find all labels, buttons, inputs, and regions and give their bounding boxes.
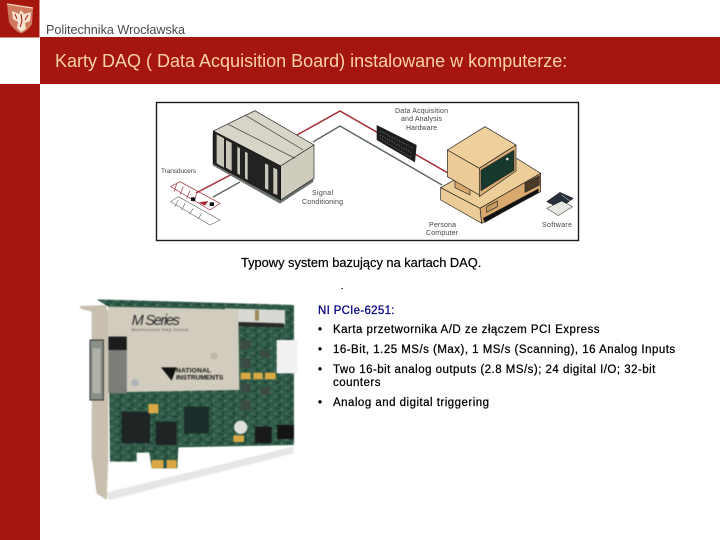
spec item 1: •: [318, 324, 323, 336]
spec item 2: •: [318, 344, 323, 356]
title band: [40, 37, 720, 84]
spec item 1: [318, 324, 600, 336]
diagram labels: Data Acquisition: [395, 108, 448, 115]
diagram labels: Transducers: [161, 168, 197, 175]
diagram labels: Signal: [312, 190, 333, 197]
metal bracket: [80, 305, 108, 500]
spec item 4: •: [318, 397, 323, 409]
small dot: [341, 288, 343, 289]
spec item 3: •: [318, 364, 323, 376]
product photo: NI PCIe-6251 card: NATIONAL: [176, 368, 211, 375]
specifications list: counters: [333, 377, 381, 389]
specifications list: Analog and digital triggering: [333, 397, 490, 409]
diagram labels: Computer: [426, 230, 459, 237]
diagram labels: Hardware: [406, 125, 437, 132]
specifications list: Two 16-bit analog outputs (2.8 MS/s); 24 digital I/O; 32-bit: [333, 364, 656, 376]
specifications list: Karta przetwornika A/D ze złączem PCI Express: [333, 324, 600, 336]
title: Karty DAQ ( Data Acquisition Board) instalowane w komputerze:: [55, 51, 567, 71]
software disks: [547, 192, 573, 216]
specifications list: 16-Bit, 1.25 MS/s (Max), 1 MS/s (Scanning), 16 Analog Inputs: [333, 344, 676, 356]
diagram labels: and Analysis: [401, 116, 442, 123]
diagram labels: Conditioning: [302, 199, 343, 206]
rack: signal conditioning: [213, 111, 314, 204]
spec item 2: [318, 344, 676, 356]
product photo: NI PCIe-6251 card: INSTRUMENTS: [176, 374, 224, 381]
product photo: NI PCIe-6251 card: [80, 298, 297, 500]
diagram: data acquisition system: [156, 102, 580, 242]
diagram labels: Software: [542, 222, 572, 229]
diagram labels: Persona: [429, 222, 456, 229]
spec item 3: [318, 364, 656, 389]
card shadow: [103, 447, 293, 500]
transducers: [171, 182, 220, 225]
spec item 4: [318, 396, 490, 409]
left red sidebar: [0, 84, 40, 540]
product photo: NI PCIe-6251 card: M Series: [132, 313, 181, 329]
diagram caption: Typowy system bazujący na kartach DAQ.: [241, 255, 481, 270]
circuit board: [97, 299, 294, 468]
chips: [122, 412, 150, 443]
logo: university name: Politechnika Wrocławska: [46, 23, 185, 37]
product photo: NI PCIe-6251 card: Multifunction DAQ Device: [132, 327, 189, 332]
signal cables: [196, 111, 448, 197]
DAQ hardware board: [377, 125, 417, 162]
spec heading: NI PCIe-6251:: [318, 305, 395, 317]
logo: university crest: [0, 0, 40, 38]
diagram labels: [161, 108, 572, 237]
silver cover: [108, 307, 239, 392]
specifications list: [318, 305, 676, 409]
personal computer: [441, 127, 541, 223]
